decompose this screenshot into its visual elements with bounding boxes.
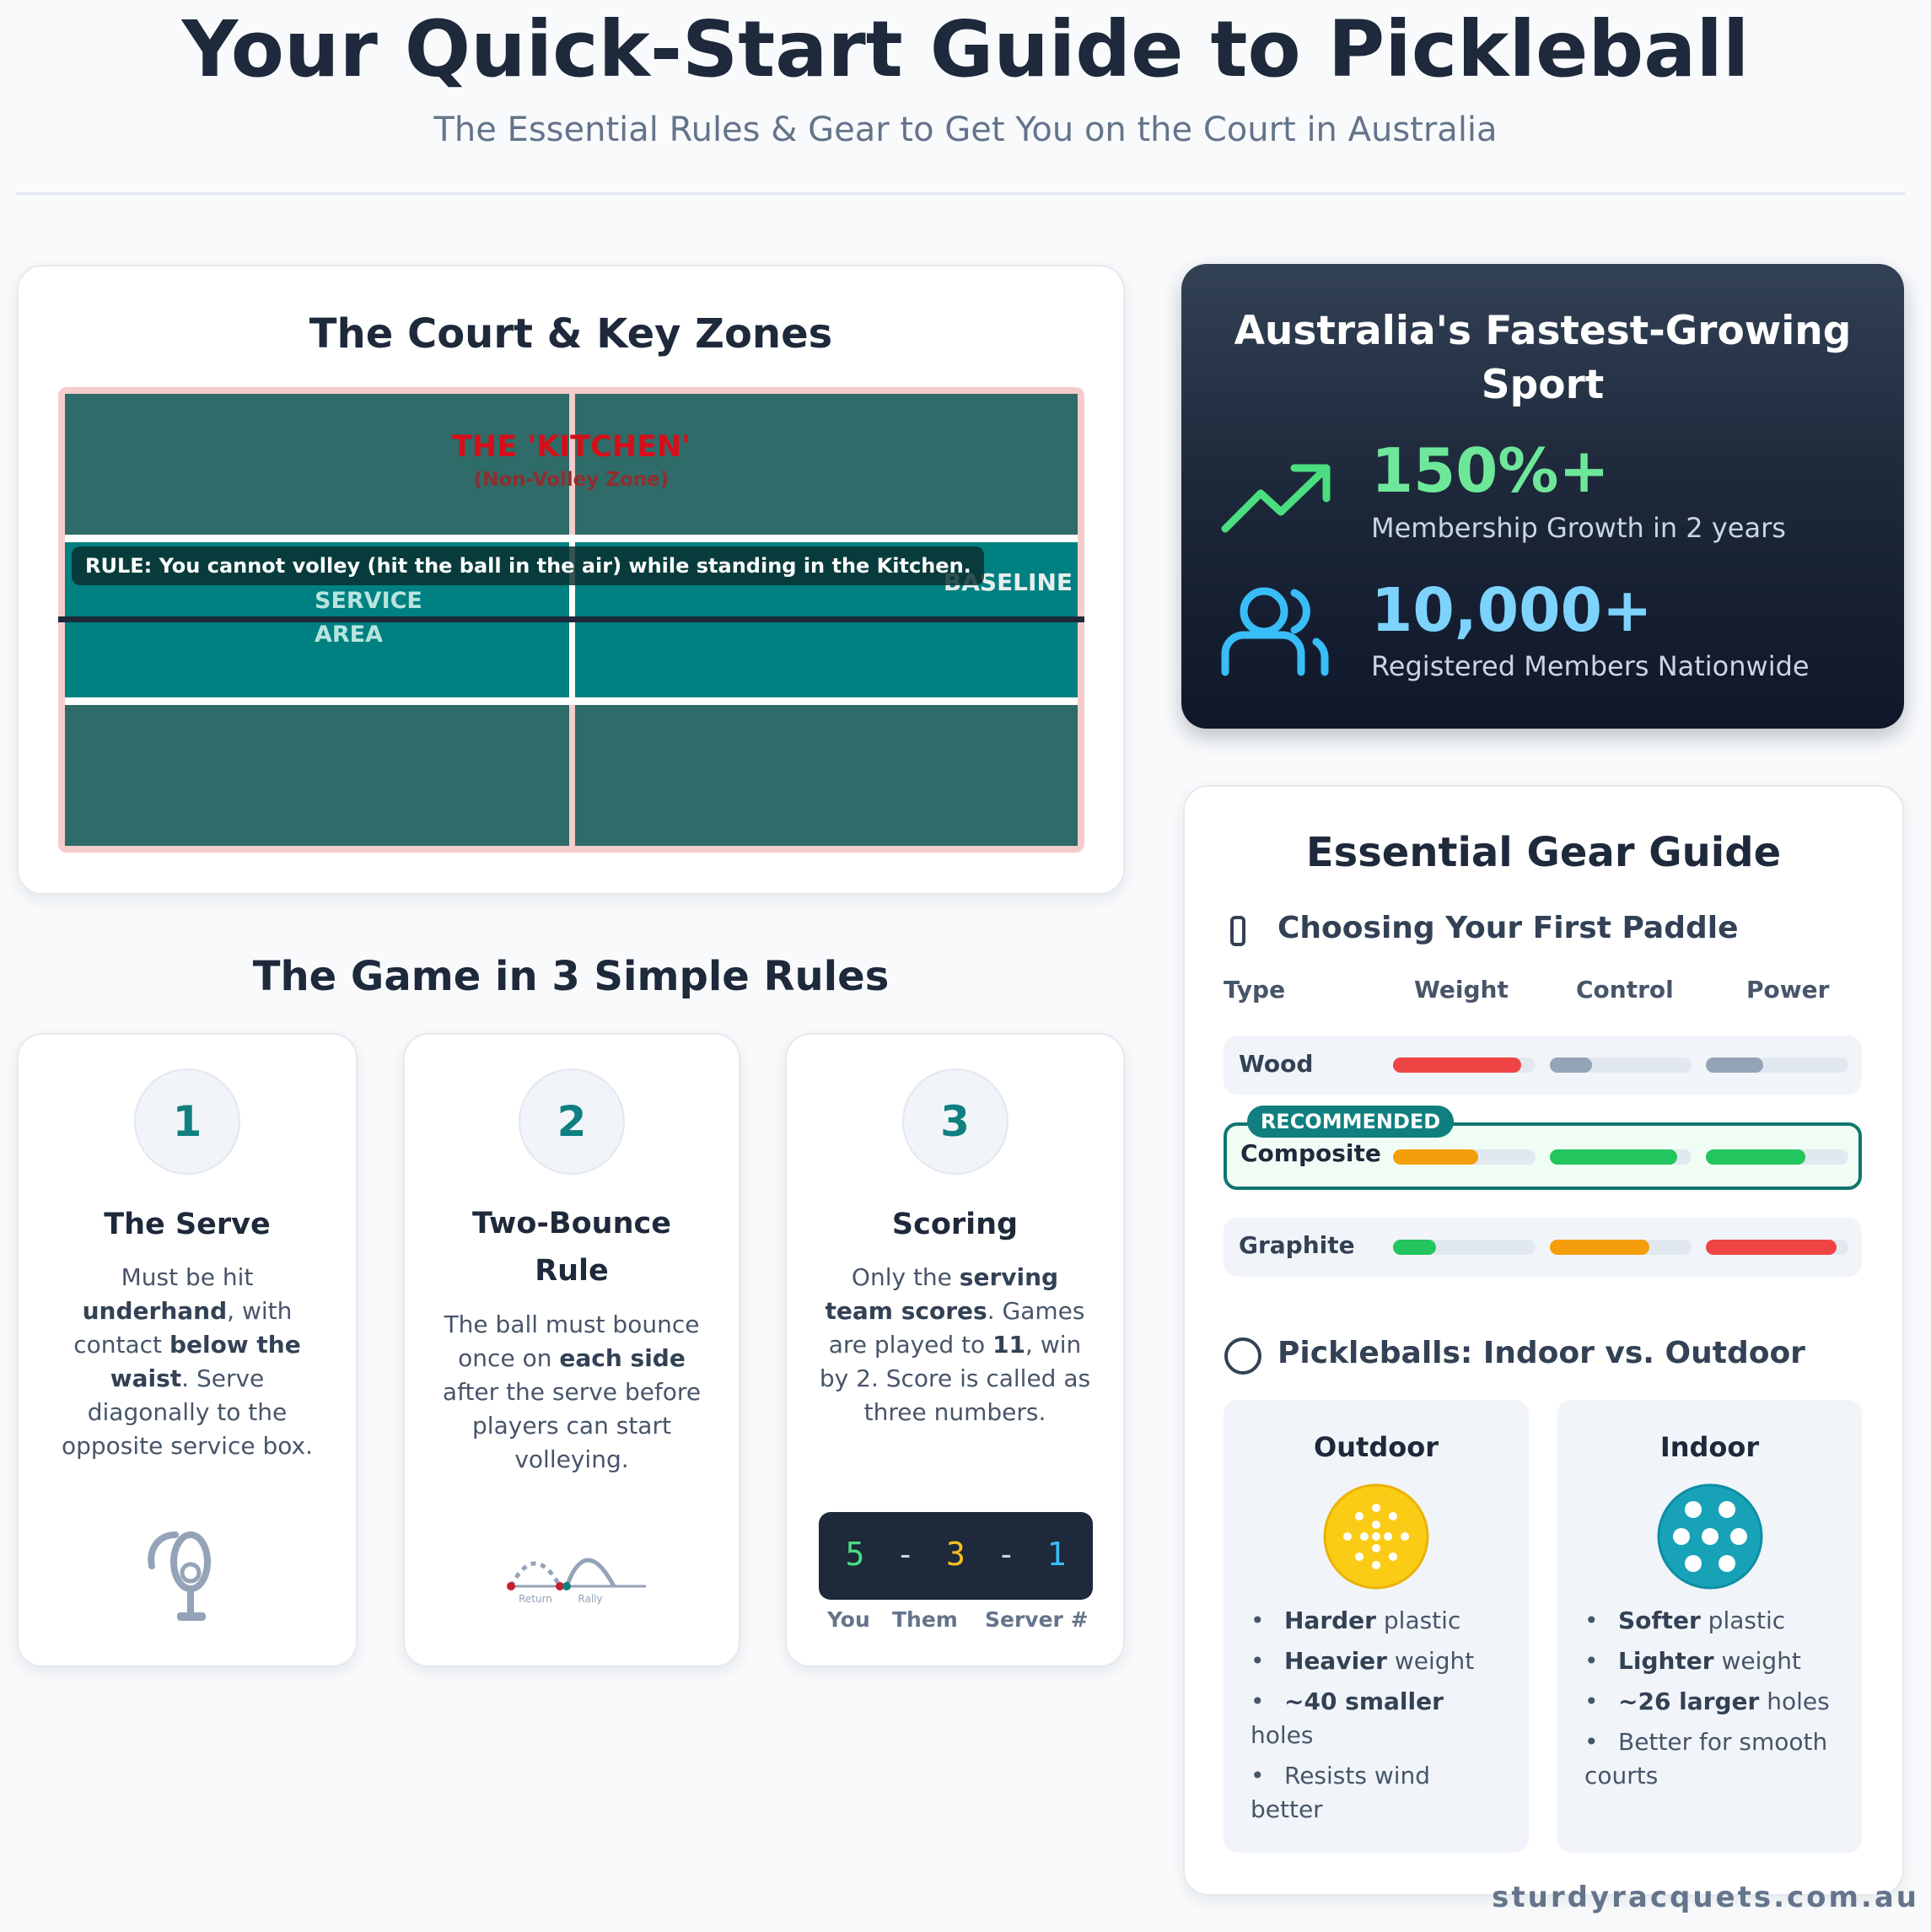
icon: ball outline <box>1224 1337 1261 1375</box>
rule text: serve: diagonally to the <box>88 1398 287 1426</box>
icon: paddle serve <box>148 1531 211 1621</box>
box: indoor ball <box>1557 1400 1862 1853</box>
number badge 1: 1 <box>173 1097 202 1146</box>
row: wood <box>1224 1036 1862 1095</box>
rule text: scoring: Only the serving <box>852 1263 1058 1291</box>
badge: recommended: RECOMMENDED <box>1261 1110 1440 1133</box>
number badge 1 <box>134 1068 240 1175</box>
rule text: serve <box>62 1263 313 1460</box>
scoreboard labels: Server # <box>985 1607 1089 1632</box>
label: service area <box>315 588 422 648</box>
stat label: members: Registered Members Nationwide <box>1371 650 1810 682</box>
text: Choosing Your First Paddle <box>1277 911 1739 945</box>
rule text: two-bounce <box>443 1310 701 1473</box>
list: indoor features: Softer plastic <box>1618 1606 1785 1634</box>
icon: users <box>1221 587 1329 676</box>
label: non-volley zone: (Non-Volley Zone) <box>474 469 669 491</box>
table header: Type <box>1224 976 1285 1004</box>
list: indoor features <box>1584 1606 1830 1789</box>
row: graphite <box>1224 1218 1862 1277</box>
text: Pickleballs: Indoor vs. Outdoor <box>1277 1336 1805 1370</box>
rule text: scoring <box>820 1263 1090 1426</box>
stats heading: Australia's Fastest-Growing <box>1234 308 1851 354</box>
rule text: two-bounce: The ball must bounce <box>444 1310 699 1338</box>
box: outdoor ball <box>1224 1400 1529 1853</box>
list: indoor features: ~26 larger holes <box>1618 1687 1830 1715</box>
subheading: paddle <box>1230 911 1739 946</box>
icon: bounce diagram <box>507 1558 646 1605</box>
rule text: scoring: team scores. Games <box>826 1297 1084 1325</box>
scoreboard labels <box>826 1607 1089 1632</box>
panel: court <box>17 265 1125 895</box>
stat: 10,000: 10,000+ <box>1371 575 1652 645</box>
row: graphite: Graphite <box>1239 1231 1355 1259</box>
table header: Control <box>1576 976 1674 1004</box>
rule text: two-bounce: once on each side <box>458 1344 686 1372</box>
scoreboard labels: You <box>827 1607 870 1632</box>
rule text: two-bounce: volleying. <box>514 1445 629 1473</box>
panel: stats <box>1181 264 1904 729</box>
stat label: growth: Membership Growth in 2 years <box>1371 512 1786 544</box>
list: outdoor features: Harder plastic <box>1284 1606 1460 1634</box>
number badge 2: 2 <box>557 1097 586 1146</box>
panel: rule 1 serve <box>17 1033 358 1667</box>
stat: 150%: 150%+ <box>1371 435 1610 506</box>
court diagram <box>58 387 1084 853</box>
table header <box>1224 976 1830 1004</box>
number badge 3 <box>902 1068 1009 1175</box>
rule title: two-bounce <box>472 1207 671 1288</box>
icon: bounce diagram: Rally <box>578 1593 603 1605</box>
panel: gear <box>1183 785 1904 1896</box>
row: composite recommended <box>1224 1122 1862 1190</box>
scoreboard: 5 - 3 - 1 <box>846 1536 1066 1573</box>
badge: recommended <box>1247 1106 1454 1138</box>
icon: bounce diagram: Return <box>519 1593 552 1605</box>
heading: rules: The Game in 3 Simple Rules <box>253 953 889 1000</box>
icon: paddle <box>1230 916 1245 946</box>
icon: trend arrow <box>1221 464 1331 533</box>
rule title: scoring: Scoring <box>892 1208 1018 1241</box>
number badge 2 <box>519 1068 625 1175</box>
rule text: serve: underhand, with <box>83 1297 292 1325</box>
label: service area: SERVICE <box>315 588 422 614</box>
list: outdoor features: Resists wind <box>1284 1762 1430 1789</box>
callout: kitchen rule <box>72 546 984 585</box>
rule title: two-bounce: Rule <box>535 1254 609 1288</box>
list: indoor features: Lighter weight <box>1618 1647 1801 1675</box>
row: composite recommended: Composite <box>1240 1139 1381 1167</box>
rule text: scoring: are played to 11, win <box>829 1331 1081 1359</box>
icon: outdoor ball <box>1324 1484 1428 1589</box>
list: indoor features: courts <box>1584 1762 1658 1789</box>
icon: indoor ball <box>1658 1484 1762 1589</box>
scoreboard labels: Them <box>892 1607 958 1632</box>
subtitle: The Essential Rules & Gear to Get You on the Court in Australia <box>433 110 1498 149</box>
box: indoor ball: Indoor <box>1660 1431 1759 1463</box>
rule text: scoring: three numbers. <box>864 1398 1046 1426</box>
rule text: serve: waist. Serve <box>110 1364 264 1392</box>
row: wood: Wood <box>1239 1050 1313 1078</box>
label: kitchen: THE 'KITCHEN' <box>452 430 691 464</box>
rule title: serve: The Serve <box>104 1208 271 1241</box>
scoreboard <box>819 1512 1093 1600</box>
label: service area: AREA <box>315 622 383 648</box>
rule text: scoring: by 2. Score is called as <box>820 1364 1090 1392</box>
net line <box>58 616 1084 622</box>
title: Your Quick-Start Guide to Pickleball <box>182 4 1749 94</box>
stats heading <box>1234 308 1851 408</box>
stats heading: Sport <box>1482 362 1604 408</box>
rule text: serve: contact below the <box>73 1331 301 1359</box>
heading: gear: Essential Gear Guide <box>1306 829 1781 876</box>
table header: Power <box>1746 976 1829 1004</box>
list: outdoor features: better <box>1251 1795 1323 1823</box>
list: outdoor features <box>1251 1606 1474 1823</box>
list: outdoor features: holes <box>1251 1721 1313 1749</box>
rule text: two-bounce: players can start <box>472 1412 671 1440</box>
box: outdoor ball: Outdoor <box>1314 1431 1439 1463</box>
label: baseline: BASELINE <box>944 568 1073 596</box>
rule text: serve: Must be hit <box>121 1263 253 1291</box>
rule text: two-bounce: after the serve before <box>443 1378 701 1406</box>
number badge 3: 3 <box>940 1097 970 1146</box>
panel: rule 2 two-bounce <box>403 1033 740 1667</box>
rule text: serve: opposite service box. <box>62 1432 313 1460</box>
heading: court: The Court & Key Zones <box>309 310 832 358</box>
rule title: two-bounce: Two-Bounce <box>472 1207 671 1240</box>
list: indoor features: Better for smooth <box>1618 1728 1827 1756</box>
callout: kitchen rule: RULE: You cannot volley (hit the ball in the air) while standing in the Kitchen. <box>85 554 971 578</box>
list: outdoor features: ~40 smaller <box>1284 1687 1444 1715</box>
list: outdoor features: Heavier weight <box>1284 1647 1474 1675</box>
panel: rule 3 scoring <box>785 1033 1125 1667</box>
subheading: balls <box>1224 1336 1805 1375</box>
table header: Weight <box>1414 976 1509 1004</box>
footer: website: sturdyracquets.com.au <box>1492 1881 1919 1914</box>
